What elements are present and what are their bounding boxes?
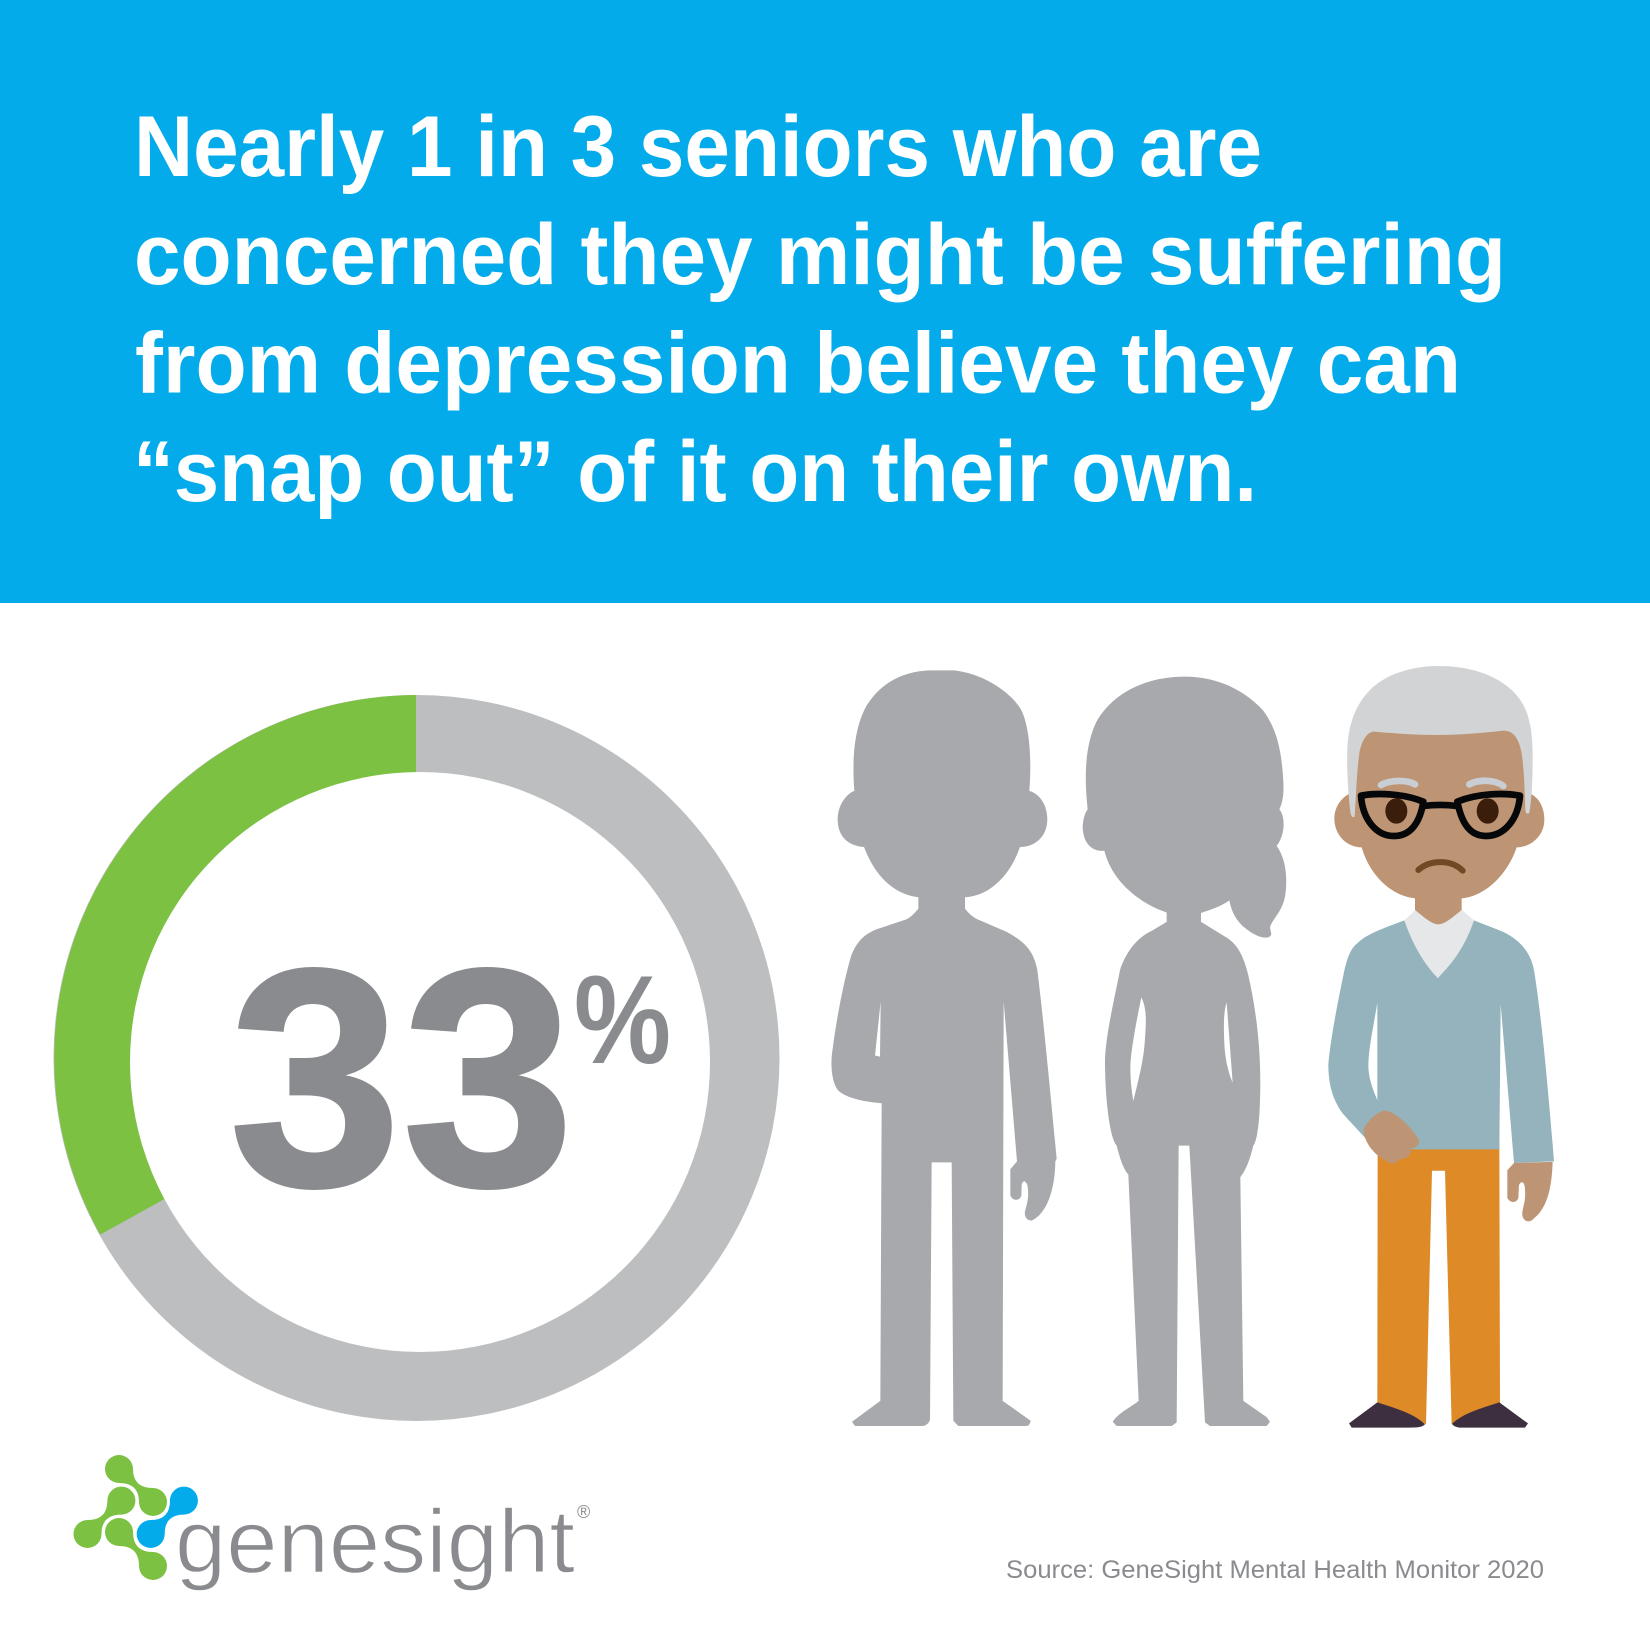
- title: [133, 99, 1506, 520]
- logo mark: [74, 1455, 198, 1580]
- logo wordmark: genesight: [175, 1492, 575, 1592]
- silhouette: man: [831, 670, 1057, 1426]
- source note: Source: GeneSight Mental Health Monitor 2020: [1006, 1556, 1544, 1584]
- silhouette: woman: [1083, 677, 1286, 1426]
- senior man illustration: [1328, 666, 1554, 1428]
- green segment: 33 percent: [54, 695, 416, 1235]
- big number 33 percent: %: [574, 951, 671, 1090]
- body and clothing: [1328, 910, 1554, 1428]
- registered mark: ®: [577, 1502, 590, 1522]
- title: from depression believe they can: [135, 316, 1461, 412]
- big number 33 percent: 33: [229, 904, 574, 1251]
- title: Nearly 1 in 3 seniors who are: [134, 99, 1262, 195]
- head with glasses and frown: [1334, 666, 1544, 924]
- logo: genesight: [74, 1455, 590, 1592]
- header panel: [0, 0, 1650, 603]
- title: “snap out” of it on their own.: [133, 424, 1257, 520]
- donut chart: 33 percent: [54, 695, 780, 1421]
- title: concerned they might be suffering: [134, 207, 1506, 303]
